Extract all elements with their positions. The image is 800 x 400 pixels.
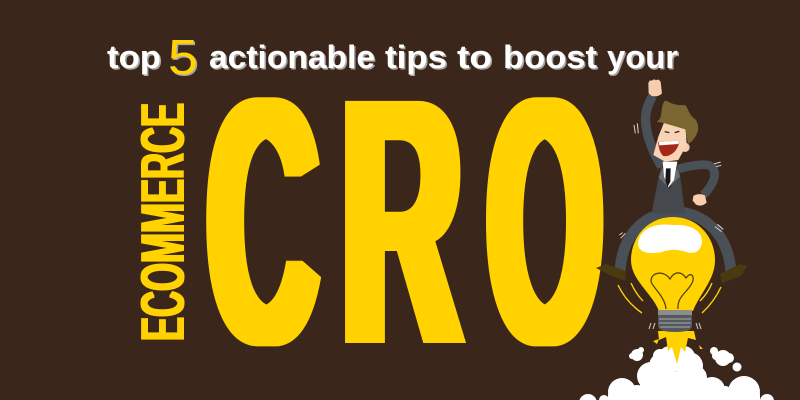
shirt and tie <box>663 162 677 187</box>
legs and shoes <box>596 212 747 283</box>
motion lines <box>619 123 723 238</box>
other arm <box>678 165 715 195</box>
title: top <box>107 39 161 75</box>
title: your <box>607 39 678 75</box>
fist <box>648 79 662 96</box>
illustration: businessman riding rocket light bulb <box>579 79 774 400</box>
title: tips <box>385 39 447 75</box>
ear <box>680 143 690 152</box>
mouth <box>658 141 679 156</box>
hair <box>657 101 698 144</box>
title: boost <box>503 39 597 75</box>
face <box>653 123 687 162</box>
lapels <box>659 168 680 187</box>
raised arm <box>646 96 662 167</box>
rocket flame <box>653 331 703 364</box>
other hand <box>693 194 707 206</box>
title: to <box>457 39 492 75</box>
title: actionable <box>209 39 375 75</box>
base shake lines <box>649 323 701 329</box>
suit body <box>652 163 685 213</box>
smoke cloud <box>579 346 774 400</box>
light bulb <box>631 217 715 332</box>
eyes <box>665 131 679 133</box>
businessman <box>619 79 723 238</box>
headline: CRO <box>208 26 602 400</box>
bulb glow lines <box>618 283 721 313</box>
title <box>107 31 678 85</box>
title: 5 <box>168 31 198 85</box>
